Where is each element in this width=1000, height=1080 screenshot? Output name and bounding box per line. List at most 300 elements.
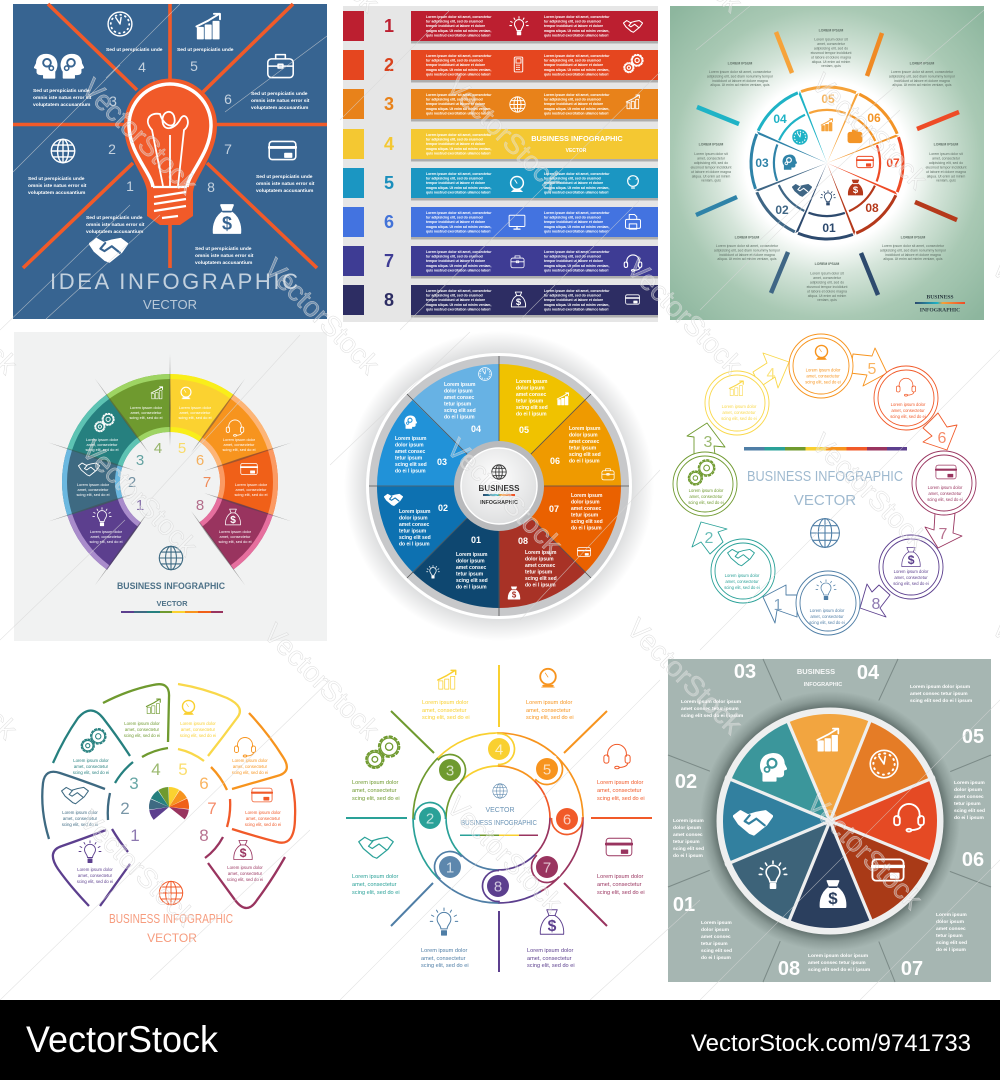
segment text: tetur ipsum [444, 402, 472, 408]
segment text: Lorem ipsum dolor [86, 437, 119, 442]
segment text: Lorem ipsum dolor [90, 529, 123, 534]
outer icons [359, 669, 632, 935]
title: idea infographic: IDEA INFOGRAPHIC [50, 269, 298, 294]
petal numbers: 6 [199, 774, 209, 793]
row 6: magna aliqua. Ut enim ad minim veniam, [544, 225, 609, 229]
segment boundary spikes [48, 354, 292, 586]
segment text: amet, consectetur [220, 534, 251, 539]
subheading: vector: VECTOR [794, 492, 856, 509]
segment text [395, 379, 603, 590]
segment numbers: 05 [821, 92, 835, 106]
petal numbers: 8 [199, 826, 209, 845]
row 1: magna aliqua. Ut enim ad minim veniam, [544, 29, 609, 33]
panel: outlined petal segments [42, 684, 295, 945]
segment text: do ei l ipsum [525, 582, 556, 588]
text blocks around the wheel: incididunt ut labore et dolore magna [712, 79, 768, 83]
row 2 [343, 50, 658, 82]
arrow numbers: 8 [872, 596, 881, 613]
row 6: tempor incididunt ut labore et dolore [426, 220, 485, 224]
text blocks: amet consec [936, 926, 966, 932]
circle text: scing elit, sed do ei [809, 620, 845, 625]
petal numbers: 5 [178, 760, 188, 779]
outer text: scing elit, sed do ei [421, 963, 469, 969]
row 4: VECTOR [566, 148, 587, 154]
row 7: quis nostrud exercitation ullamco labori [426, 268, 490, 272]
segment text: dolor ipsum [571, 500, 600, 506]
central hub: BUSINESS [479, 484, 520, 493]
segment numbers: 05 [519, 425, 529, 435]
row 1: 1 [384, 16, 394, 36]
watermark repeats: VectorStock [806, 67, 934, 196]
arrow numbers [704, 361, 948, 614]
segment text: scing elit sed [444, 408, 476, 414]
text blocks around the wheel: Lorem ipsum dolor sit amet, consectetur [709, 70, 772, 74]
row 3: magna aliqua. Ut enim ad minim veniam, [426, 107, 491, 111]
step numbers: 4 [138, 59, 146, 75]
large numbers: 04 [857, 662, 880, 684]
row 1: tempor incididunt ut labore et dolore [426, 24, 485, 28]
segment text: amet consec [399, 522, 430, 528]
text blocks: do ei l ipsum [954, 815, 985, 821]
segment text: Lorem ipsum [444, 382, 476, 388]
circle icons [688, 345, 956, 600]
numbered nodes: 2 [426, 810, 434, 828]
segment text: amet, consectetur [78, 487, 109, 492]
text blocks around the wheel: aliqua. Ut enim ad minim veniam, quis [892, 83, 952, 87]
segment text: amet, consectetur [131, 410, 162, 415]
segment text: amet, consectetur [180, 410, 211, 415]
mini pie chart [155, 793, 183, 821]
segment text: Lorem ipsum [525, 550, 557, 556]
circle text: amet, consectetur [725, 579, 759, 584]
row 5: magna aliqua. Ut enim ad minim veniam, [544, 186, 609, 190]
segment numbers: 03 [755, 156, 769, 170]
petal text: amet, consectetur [233, 764, 268, 769]
row 2: Lorem ipsum dolor sit amet, consectetur [544, 54, 610, 58]
segment text: scing elit, sed do ei [76, 492, 110, 497]
inner numbers: 4 [154, 440, 162, 457]
segment text: scing elit, sed do ei [234, 492, 268, 497]
outer text: Lorem ipsum dolor [352, 780, 398, 786]
pie segments [413, 400, 585, 572]
row 8: magna aliqua. Ut enim ad minim veniam, [544, 303, 609, 307]
row 4: BUSINESS INFOGRAPHIC [531, 134, 623, 143]
segment numbers: 04 [773, 112, 787, 126]
segment numbers: 07 [549, 504, 559, 514]
text blocks: scing elit sed do ei l ipsum [910, 698, 973, 704]
petal text: Lorem ipsum dolor [124, 721, 160, 726]
background dividing lines [668, 659, 991, 982]
row 4: magna aliqua. Ut enim ad minim veniam, [426, 147, 491, 151]
row 7: Lorem ipsum dolor sit amet, consectetur [544, 250, 610, 254]
text blocks: voluptatem accusantium [28, 190, 86, 196]
icon: globe [159, 881, 183, 905]
petal text [62, 721, 281, 884]
text blocks around the wheel: Lorem ipsum dolor sit [929, 152, 963, 156]
wedge icons [734, 729, 924, 908]
row 5: magna aliqua. Ut enim ad minim veniam, [426, 186, 491, 190]
text blocks around the wheel: LOREM IPSUM [735, 236, 759, 240]
text blocks: Lorem ipsum [673, 818, 704, 824]
row 2: tur adipisicing elit, sed do eiusmod [544, 59, 601, 63]
circle text: amet, consectetur [891, 408, 925, 413]
segment text: scing elit, sed do ei [89, 539, 123, 544]
text blocks around the wheel: veniam, quis [821, 64, 841, 68]
segment text: Lorem ipsum [456, 552, 488, 558]
segment text: Lorem ipsum [571, 493, 603, 499]
watermark repeats: VectorStock [806, 427, 934, 556]
row 4: quis nostrud exercitation ullamco labori [426, 151, 490, 155]
inner numbers: 3 [136, 452, 144, 469]
segment numbers: 01 [471, 535, 481, 545]
watermark repeats: VectorStock [76, 434, 204, 563]
row 3: 3 [384, 94, 394, 114]
panel: horseshoe ring with eight segments [14, 332, 327, 641]
circle text: Lorem ipsum dolor [894, 569, 929, 574]
segment text: Lorem ipsum [569, 426, 601, 432]
outer text: amet, consectetur [421, 956, 466, 962]
step numbers: 8 [207, 179, 215, 195]
text blocks around the wheel: adipisicing elit, sed do [810, 280, 844, 284]
numbered nodes: 1 [446, 860, 454, 876]
footer image id: VectorStock.com/9741733 [691, 1030, 971, 1057]
outer text: scing elit, sed do ei [597, 890, 645, 896]
circle text: scing elit, sed do ei [893, 581, 929, 586]
segment text: Lorem ipsum [395, 436, 427, 442]
row 3: tur adipisicing elit, sed do eiusmod [544, 98, 601, 102]
segment text: scing elit, sed do ei [218, 539, 252, 544]
segment text: amet, consectetur [236, 487, 267, 492]
petal outlines [42, 684, 295, 908]
outer text: Lorem ipsum dolor [527, 948, 573, 954]
row 4: tempor incididunt ut labore et dolore [426, 142, 485, 146]
row 5: Lorem ipsum dolor sit amet, consectetur [426, 172, 492, 176]
row 6: Lorem ipsum dolor sit amet, consectetur [544, 211, 610, 215]
petal text: Lorem ipsum dolor [245, 810, 281, 815]
text blocks: voluptatem accusantium [195, 260, 253, 266]
text blocks: scing elit sed [673, 846, 704, 852]
inner numbers: 6 [196, 452, 204, 469]
row 5: quis nostrud exercitation ullamco labori [544, 190, 608, 194]
segment text: Lorem ipsum dolor [77, 482, 110, 487]
circle text: amet, consectetur [928, 491, 962, 496]
ring segments [23, 335, 317, 629]
business infographic caption: INFOGRAPHIC [920, 308, 960, 314]
segment text: Lorem ipsum [516, 379, 548, 385]
petal text: amet, consectetur [181, 727, 216, 732]
petal text: scing elit, sed do ei [124, 733, 160, 738]
panel: horizontal list with eight bars [343, 6, 658, 322]
outer text: amet, consectetur [597, 882, 642, 888]
text blocks around the wheel: eiusmod tempor incididunt [926, 166, 966, 170]
segment text: tetur ipsum [571, 512, 599, 518]
icon: globe [811, 519, 839, 547]
text blocks around the wheel: incididunt ut labore et dolore magna [885, 253, 941, 257]
row 3: quis nostrud exercitation ullamco labori [426, 111, 490, 115]
petal text: Lorem ipsum dolor [73, 758, 109, 763]
icons around the bulb [35, 12, 296, 262]
segment text: scing elit, sed do ei [178, 415, 212, 420]
outer text: scing elit, sed do ei [597, 796, 645, 802]
panel: pie on grey background [668, 659, 991, 982]
inner numbers: 5 [178, 440, 186, 457]
row 3: tur adipisicing elit, sed do eiusmod [426, 98, 483, 102]
segment text: dolor ipsum [569, 432, 598, 438]
segment text: scing elit sed [399, 535, 431, 541]
row 2: quis nostrud exercitation ullamco labori [544, 72, 608, 76]
circle text: Lorem ipsum dolor [806, 368, 841, 372]
segment text: do ei l ipsum [571, 526, 602, 532]
segment text: amet consec [571, 506, 602, 512]
segment text: tetur ipsum [399, 528, 427, 534]
step numbers: 3 [109, 93, 117, 109]
row 6: quis nostrud exercitation ullamco labori [426, 229, 490, 233]
business infographic caption: BUSINESS [926, 294, 954, 300]
step numbers: 2 [108, 141, 116, 157]
petal text: amet, consectetur [246, 816, 281, 821]
text blocks: Lorem ipsum dolor ipsum [910, 684, 971, 690]
text blocks around the wheel: LOREM IPSUM [934, 142, 958, 146]
heading: business infographic: BUSINESS INFOGRAPHIC [117, 581, 225, 592]
text blocks around the wheel: aliqua. Ut enim ad minim [692, 174, 730, 178]
segment text: do ei l ipsum [395, 468, 426, 474]
text blocks around the wheel: LOREM IPSUM [728, 62, 752, 66]
text blocks around the wheel: eiusmod tempor incididunt [811, 51, 851, 55]
text blocks: Sed ut perspiciatis unde [28, 176, 85, 182]
text blocks around the wheel: adipisicing elit, sed do [694, 161, 728, 165]
text blocks: tetur ipsum [673, 839, 700, 845]
text blocks around the wheel: aliqua. Ut enim ad minim veniam, quis [717, 257, 777, 261]
step numbers [108, 58, 232, 195]
petal text: scing elit, sed do ei [232, 770, 268, 775]
row 3: tempor incididunt ut labore et dolore [544, 102, 603, 106]
text blocks: scing elit sed [954, 808, 985, 814]
segment numbers: 04 [471, 424, 481, 434]
text blocks around the wheel: adipisicing elit, sed do [814, 46, 848, 50]
text blocks: scing elit sed do ei l ipsum [681, 713, 744, 719]
petal text: Lorem ipsum dolor [62, 810, 98, 815]
text blocks around the wheel: ut labore et dolore magna [926, 170, 966, 174]
pie shadow [700, 691, 960, 951]
row 8: tempor incididunt ut labore et dolore [426, 298, 485, 302]
text blocks around the wheel: incididunt ut labore et dolore magna [894, 79, 950, 83]
text blocks: omnis iste natus error sit [256, 181, 315, 187]
segment text: tetur ipsum [525, 570, 553, 576]
segment icons [384, 368, 614, 600]
row 3: Lorem ipsum dolor sit amet, consectetur [426, 93, 492, 97]
segment numbers: 08 [865, 201, 879, 215]
arrow numbers: 7 [939, 526, 948, 543]
central hub: INFOGRAPHIC [480, 500, 518, 506]
text blocks: scing elit sed do ei l ipsum [808, 967, 871, 973]
petal text: scing elit, sed do ei [180, 733, 216, 738]
row 1: Lorem ipsum dolor sit amet, consectetur [544, 15, 610, 19]
panel: exploded wheel on green background [670, 6, 984, 320]
watermark repeats: VectorStock [74, 804, 202, 933]
row 7: quis nostrud exercitation ullamco labori [544, 268, 608, 272]
circle text: scing elit, sed do ei [721, 416, 757, 421]
text blocks: amet consec [954, 794, 984, 800]
text blocks around the wheel: ut labore et dolore magna [807, 290, 847, 294]
text blocks: omnis iste natus error sit [86, 222, 145, 228]
segment text: dolor ipsum [444, 388, 473, 394]
petal text: amet, consectetur [74, 764, 109, 769]
spoke lines [369, 356, 629, 616]
icon: globe [159, 546, 183, 570]
petal text: amet, consectetur [228, 871, 263, 876]
row 7: tempor incididunt ut labore et dolore [544, 259, 603, 263]
circle text: scing elit, sed do ei [805, 380, 841, 384]
row 8: magna aliqua. Ut enim ad minim veniam, [426, 303, 491, 307]
row 4: 4 [384, 134, 394, 154]
outer text: amet, consectetur [422, 708, 467, 714]
wheel segments [690, 26, 964, 300]
arrow numbers: 2 [705, 530, 714, 547]
segment text: do ei l ipsum [569, 458, 600, 464]
row 7 [343, 246, 658, 278]
row 6: magna aliqua. Ut enim ad minim veniam, [426, 225, 491, 229]
text blocks around the wheel: amet, consectetur [697, 156, 726, 160]
outer text: amet, consectetur [597, 788, 642, 794]
text blocks around the wheel: aliqua. Ut enim ad minim [812, 60, 850, 64]
circle text: Lorem ipsum dolor [722, 404, 757, 409]
text blocks: amet consec tetur ipsum [808, 960, 866, 966]
text blocks around the wheel: LOREM IPSUM [815, 262, 839, 266]
row 8: tur adipisicing elit, sed do eiusmod [544, 294, 601, 298]
text blocks: amet consec tetur ipsum [681, 706, 739, 712]
text blocks around the wheel: veniam, quis [817, 298, 837, 302]
segment text: do ei l ipsum [444, 414, 475, 420]
row 1: quis nostrud exercitation ullamco labori [426, 33, 490, 37]
circle text: amet, consectetur [689, 494, 723, 499]
subheading: vector: VECTOR [485, 807, 515, 814]
text blocks [673, 684, 985, 973]
watermark repeats: VectorStock [621, 252, 749, 381]
heading: business infographic: BUSINESS INFOGRAPHIC [461, 818, 537, 827]
panel: circles and arrows cycle [673, 334, 976, 635]
text blocks: Sed ut perspiciatis unde [106, 47, 163, 53]
numbered nodes: 3 [446, 762, 454, 780]
outer text: Lorem ipsum dolor [597, 780, 643, 786]
segment text: amet consec [569, 439, 600, 445]
segment text: dolor ipsum [516, 386, 545, 392]
petal text: Lorem ipsum dolor [227, 865, 263, 870]
text blocks: omnis iste natus error sit [33, 95, 92, 101]
segment numbers: 02 [775, 203, 789, 217]
text blocks around the wheel: aliqua. Ut enim ad minim [927, 174, 965, 178]
segment text: amet consec [395, 449, 426, 455]
text blocks: do ei l ipsum [673, 853, 704, 859]
row 1 [343, 11, 658, 44]
outer text: Lorem ipsum dolor [526, 700, 572, 706]
petal numbers: 1 [130, 826, 140, 845]
segment text: amet consec [456, 565, 487, 571]
subtitle: vector: VECTOR [143, 297, 197, 312]
text blocks around the wheel: ut labore et dolore magna [811, 56, 851, 60]
colour strip [460, 834, 538, 836]
segment text: scing elit sed [569, 452, 601, 458]
row 3: magna aliqua. Ut enim ad minim veniam, [544, 107, 609, 111]
text blocks around the wheel: Lorem ipsum dolor sit amet, consectetur [891, 70, 954, 74]
text blocks around the wheel: Lorem ipsum dolor sit [810, 272, 844, 276]
row 6 [343, 207, 658, 240]
row 6: quis nostrud exercitation ullamco labori [544, 229, 608, 233]
row 3 [343, 89, 658, 122]
petal text: amet, consectetur [78, 873, 113, 878]
step numbers: 6 [224, 91, 232, 107]
step numbers: 5 [190, 58, 198, 74]
circle text: scing elit, sed do ei [890, 414, 926, 419]
outer text: amet, consectetur [526, 708, 571, 714]
numbered nodes: 6 [563, 812, 571, 828]
row 2: quis nostrud exercitation ullamco labori [426, 72, 490, 76]
text blocks around the wheel: veniam, quis [701, 178, 721, 182]
row 5: Lorem ipsum dolor sit amet, consectetur [544, 172, 610, 176]
text blocks: omnis iste natus error sit [195, 253, 254, 259]
arrows [687, 348, 962, 623]
colour strip [121, 611, 223, 613]
outer radial dashes [696, 32, 959, 295]
text blocks: voluptatem accusantium [256, 188, 314, 194]
petal text: Lorem ipsum dolor [77, 867, 113, 872]
petal numbers: 7 [207, 799, 217, 818]
row 7: magna aliqua. Ut enim ad minim veniam, [544, 264, 609, 268]
text blocks around the wheel: Lorem ipsum dolor sit [814, 38, 848, 42]
segment text: scing elit, sed do ei [85, 447, 119, 452]
large numbers: 07 [901, 958, 923, 980]
segment icons [783, 119, 873, 205]
segment text: scing elit sed [571, 519, 603, 525]
text blocks around the wheel: Lorem ipsum dolor sit amet, consectetur [882, 244, 945, 248]
row 4: tur adipisicing elit, sed do eiusmod [426, 138, 483, 142]
radial lines [346, 665, 652, 972]
text blocks: Sed ut perspiciatis unde [195, 246, 252, 252]
outer text: Lorem ipsum dolor [597, 874, 643, 880]
large numbers: 08 [778, 958, 800, 980]
text blocks: voluptatem accusantium [33, 102, 91, 108]
text blocks around the wheel: incididunt ut labore et dolore magna [719, 253, 775, 257]
numbered nodes [413, 732, 584, 903]
segment numbers: 07 [886, 156, 900, 170]
watermark repeats: VectorStock [441, 790, 569, 919]
row 7: tempor incididunt ut labore et dolore [426, 259, 485, 263]
petal text: amet, consectetur [125, 727, 160, 732]
inner numbers: 8 [196, 497, 204, 514]
outer text: scing elit, sed do ei [527, 963, 575, 969]
row 5: quis nostrud exercitation ullamco labori [426, 190, 490, 194]
circle text: amet, consectetur [722, 410, 756, 415]
large numbers: 01 [673, 894, 695, 916]
outer text: amet, consectetur [352, 788, 397, 794]
row 1: tempor incididunt ut labore et dolore [544, 24, 603, 28]
petal icons [62, 699, 272, 862]
text blocks around the wheel: adipisicing elit, sed diam nonummy tempor [707, 74, 774, 78]
segment text: dolor ipsum [395, 442, 424, 448]
row 6: Lorem ipsum dolor sit amet, consectetur [426, 211, 492, 215]
text blocks: amet consec [701, 934, 731, 940]
circle text [688, 368, 963, 625]
row 5: tempor incididunt ut labore et dolore [544, 181, 603, 185]
text blocks around the wheel: Lorem ipsum dolor sit [694, 152, 728, 156]
petal text: scing elit, sed do ei [245, 822, 281, 827]
row 3: quis nostrud exercitation ullamco labori [544, 111, 608, 115]
segment text: amet, consectetur [91, 534, 122, 539]
text blocks: Lorem ipsum [701, 920, 732, 926]
circle text: amet, consectetur [810, 614, 844, 619]
text blocks around the wheel: amet, consectetur [817, 42, 846, 46]
text blocks around the wheel: aliqua. Ut enim ad minim veniam, quis [710, 83, 770, 87]
wedge gaps [725, 716, 935, 926]
